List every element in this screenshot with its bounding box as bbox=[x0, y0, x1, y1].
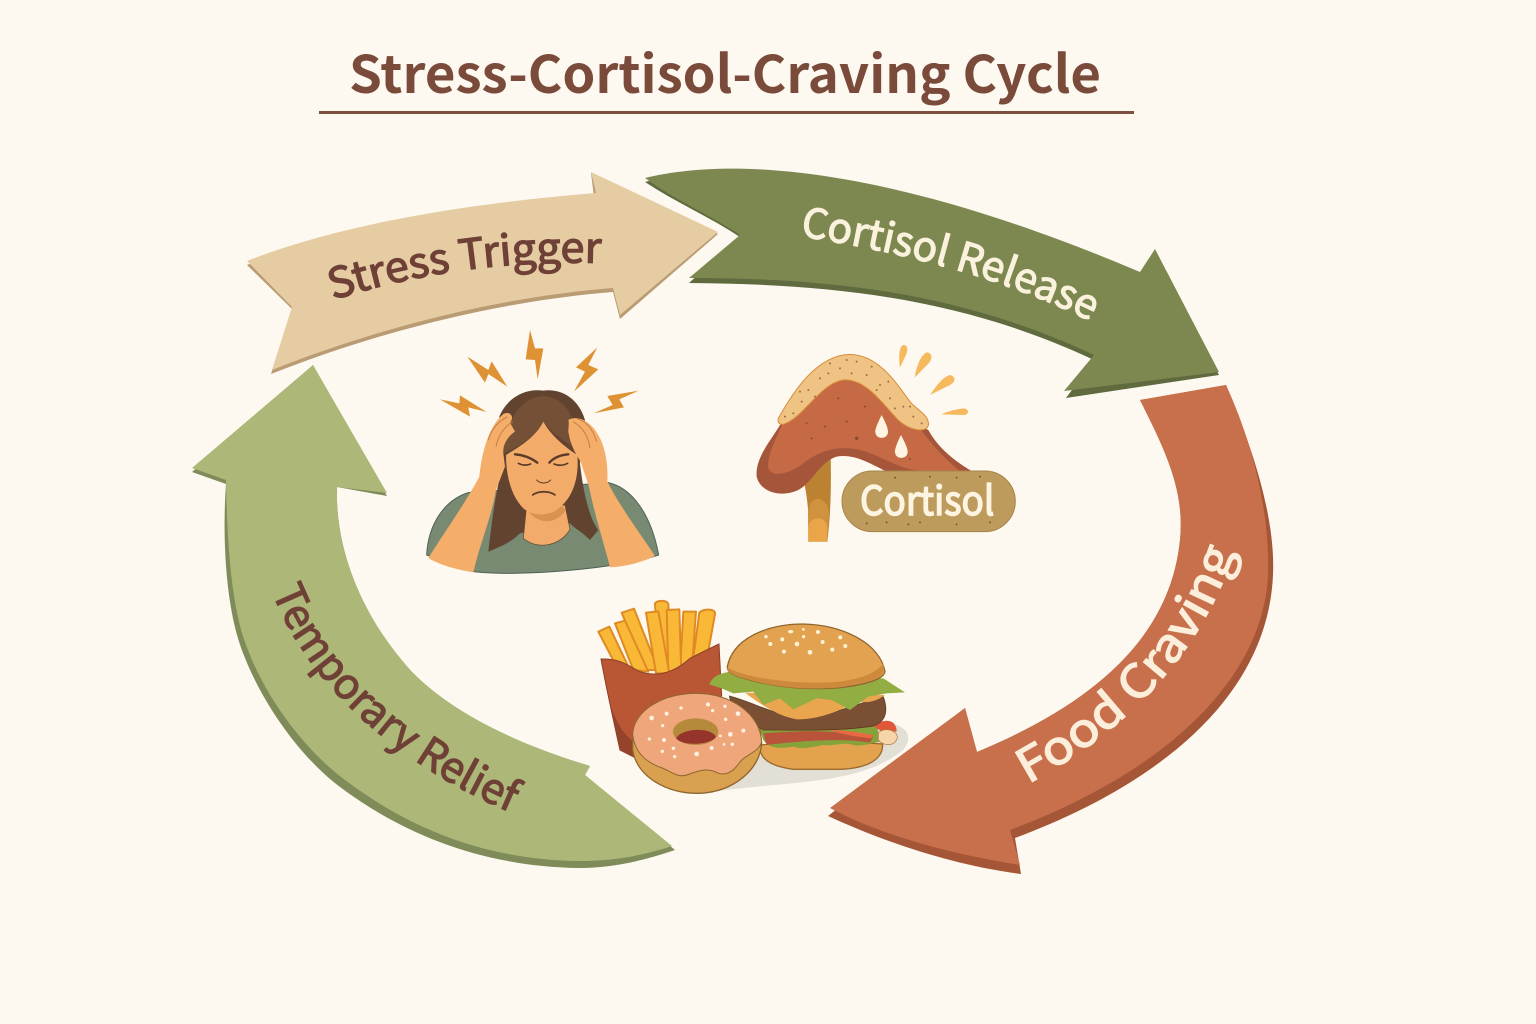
arrow: temporary relief: Temporary Relief bbox=[275, 580, 526, 811]
illustration: stressed person bbox=[427, 330, 659, 573]
hair bbox=[488, 390, 598, 552]
arrow: stress trigger: Stress Trigger bbox=[328, 232, 602, 298]
title: Stress-Cortisol-Craving Cycle bbox=[349, 33, 1101, 108]
drops bbox=[875, 415, 888, 438]
arrow: stress trigger bbox=[247, 172, 718, 374]
bacon bbox=[763, 731, 873, 745]
rays bbox=[899, 345, 968, 415]
lower lettuce bbox=[757, 722, 880, 748]
gland body bbox=[757, 378, 972, 494]
stem bbox=[803, 455, 831, 542]
face bbox=[506, 422, 578, 514]
fries bbox=[598, 601, 715, 673]
illustration: adrenal gland bbox=[757, 345, 1015, 542]
cap bbox=[778, 354, 928, 430]
lettuce bbox=[709, 672, 905, 710]
facial features bbox=[515, 454, 568, 495]
sprinkles bbox=[648, 702, 745, 758]
arrow: food craving bbox=[828, 385, 1274, 874]
cheese bbox=[745, 693, 885, 719]
shadow bbox=[700, 725, 908, 793]
sesame seeds bbox=[764, 628, 847, 655]
illustration: adrenal gland: Cortisol bbox=[860, 469, 994, 527]
donut bbox=[633, 730, 762, 793]
patty bbox=[729, 696, 886, 730]
arrow: temporary relief bbox=[192, 365, 675, 868]
tomato and onion bbox=[873, 721, 897, 732]
arms and hands bbox=[428, 413, 515, 572]
donut hole bbox=[673, 718, 718, 745]
top bun bbox=[727, 624, 885, 689]
arrow: food craving: Food Craving bbox=[1014, 544, 1242, 782]
burger bottom bun bbox=[760, 742, 883, 769]
neck bbox=[523, 505, 570, 545]
arrow: cortisol release: Cortisol Release bbox=[804, 208, 1096, 320]
label pill bbox=[842, 471, 1015, 532]
fries box bbox=[601, 644, 722, 757]
illustration: junk food bbox=[598, 601, 908, 793]
arrow: cortisol release bbox=[645, 168, 1219, 398]
shirt bbox=[427, 483, 659, 573]
icon: lightning bolts bbox=[440, 330, 639, 417]
